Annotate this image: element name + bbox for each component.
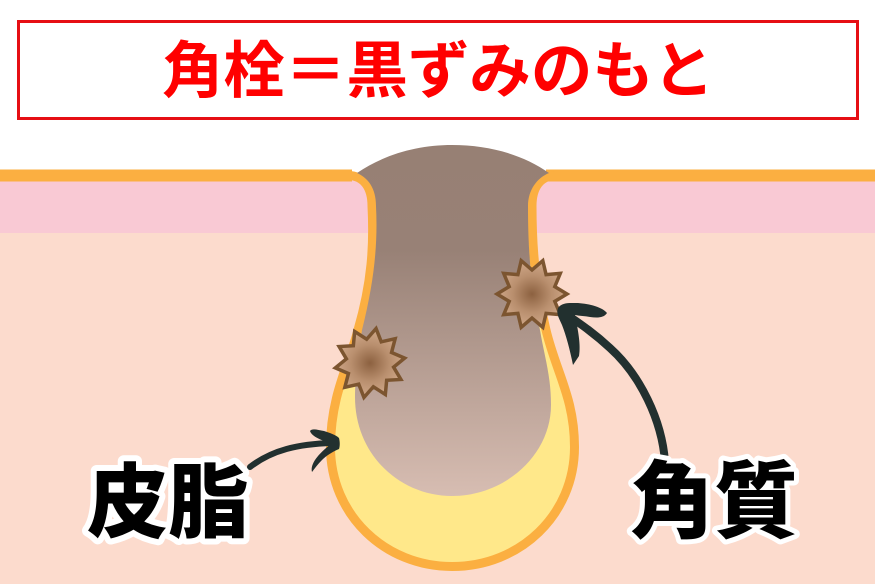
skin surface line (0, 170, 875, 182)
sebum-filled pore (330, 176, 574, 566)
title box (18, 21, 858, 118)
arrow: sebum (250, 429, 340, 472)
title: 角栓＝黒ずみのもと (162, 21, 714, 110)
label: sebum: 皮脂 (87, 438, 249, 555)
arrow: keratin (557, 303, 665, 462)
keratin particle: right (497, 261, 567, 327)
label: keratin: 角質 (630, 435, 798, 556)
keratin particle: left (331, 325, 409, 401)
skin background (0, 175, 875, 584)
keratin plug (355, 145, 551, 496)
